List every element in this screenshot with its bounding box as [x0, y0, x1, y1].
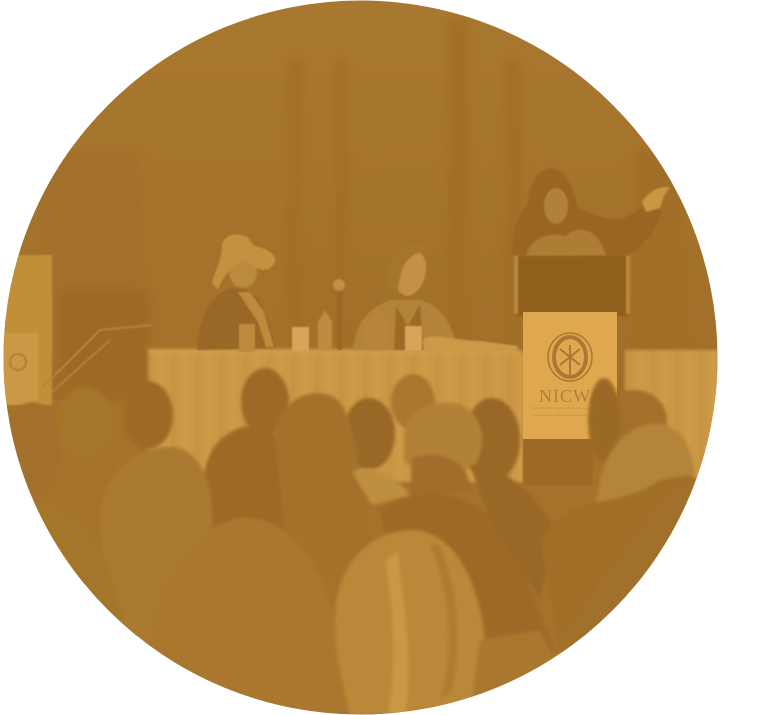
- microphone and table items: [239, 279, 518, 352]
- seated panelist: [353, 252, 454, 350]
- sign wordmark: NICWA: [539, 386, 603, 406]
- sign fine print: [532, 406, 588, 416]
- sign fine print: National Indian Child Welfare Association: [532, 406, 592, 410]
- sign fine print: Protecting Our Children Preserving Our Culture: [532, 413, 600, 417]
- audience back row: [4, 368, 667, 494]
- audience front row: [140, 518, 555, 715]
- podium: [514, 256, 630, 485]
- audience middle row: [32, 392, 697, 688]
- sign logo: [548, 333, 592, 381]
- left sign panel: [2, 255, 152, 405]
- table with pleated cloth: [148, 349, 720, 482]
- panelist in hat: [197, 234, 276, 350]
- NICWA podium sign: [523, 312, 617, 439]
- speaker at podium: [512, 168, 670, 258]
